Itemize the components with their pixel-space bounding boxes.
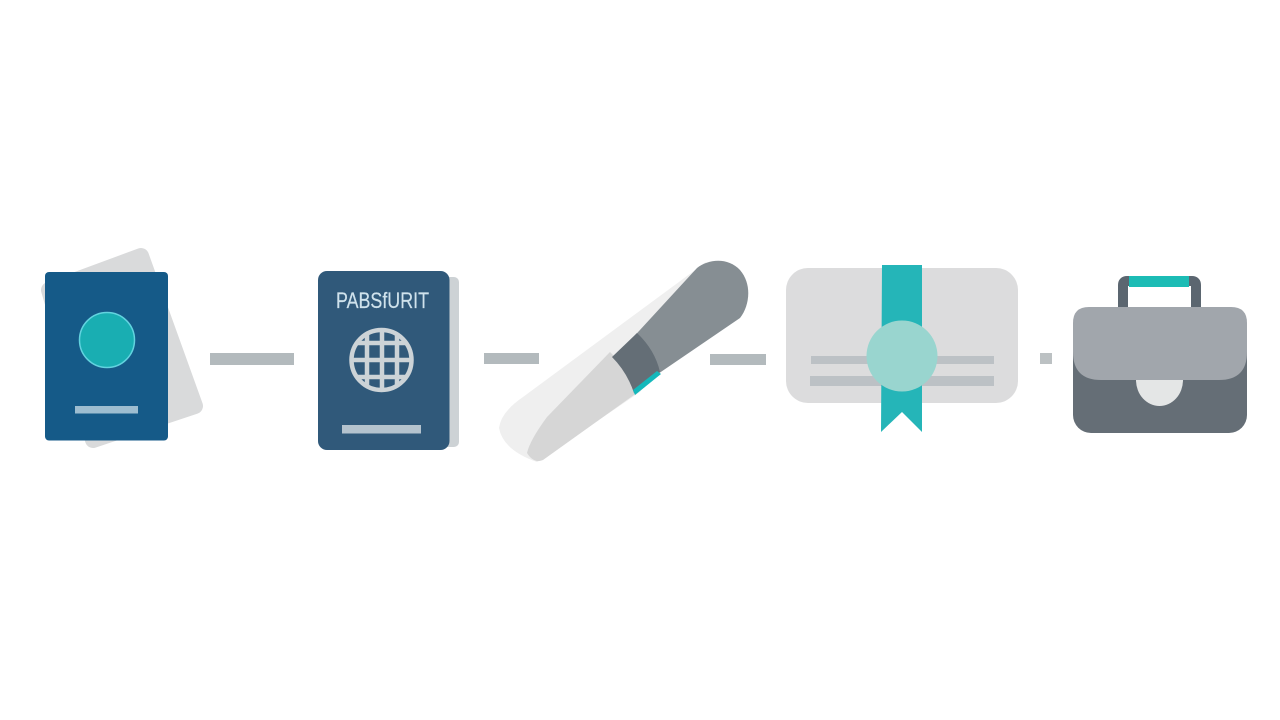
text lines xyxy=(811,356,994,364)
ribbon xyxy=(881,265,922,432)
passport title: PABSfURIT xyxy=(336,288,429,313)
teal band edge xyxy=(633,371,661,395)
handle grip xyxy=(1129,276,1189,287)
case flap xyxy=(1073,307,1247,380)
icon: briefcase xyxy=(1073,276,1247,433)
dark band xyxy=(612,333,660,393)
globe xyxy=(350,327,413,393)
grey paper face xyxy=(527,352,645,461)
case body xyxy=(1073,320,1247,433)
passport cover xyxy=(318,271,450,450)
passport cover xyxy=(45,272,168,440)
dark right section xyxy=(628,261,748,378)
connector 1 xyxy=(210,353,294,365)
connector 4 xyxy=(1040,353,1052,364)
teal emblem xyxy=(80,312,134,368)
connector 2 xyxy=(484,353,539,364)
white roll side xyxy=(499,262,706,462)
icon: diploma certificate with ribbon xyxy=(786,265,1018,432)
handle xyxy=(1123,281,1196,307)
icon: rolled document xyxy=(499,261,748,462)
page edge xyxy=(440,277,459,447)
seal xyxy=(866,320,938,392)
icon: blue passport with back sheet xyxy=(45,256,195,440)
connector 3 xyxy=(710,354,766,365)
cover label bar xyxy=(75,406,138,414)
latch xyxy=(1136,380,1183,406)
back sheet xyxy=(49,256,195,440)
certificate card xyxy=(786,268,1018,403)
cover label bar xyxy=(342,425,421,434)
icon: navy passport with globe xyxy=(318,271,459,450)
